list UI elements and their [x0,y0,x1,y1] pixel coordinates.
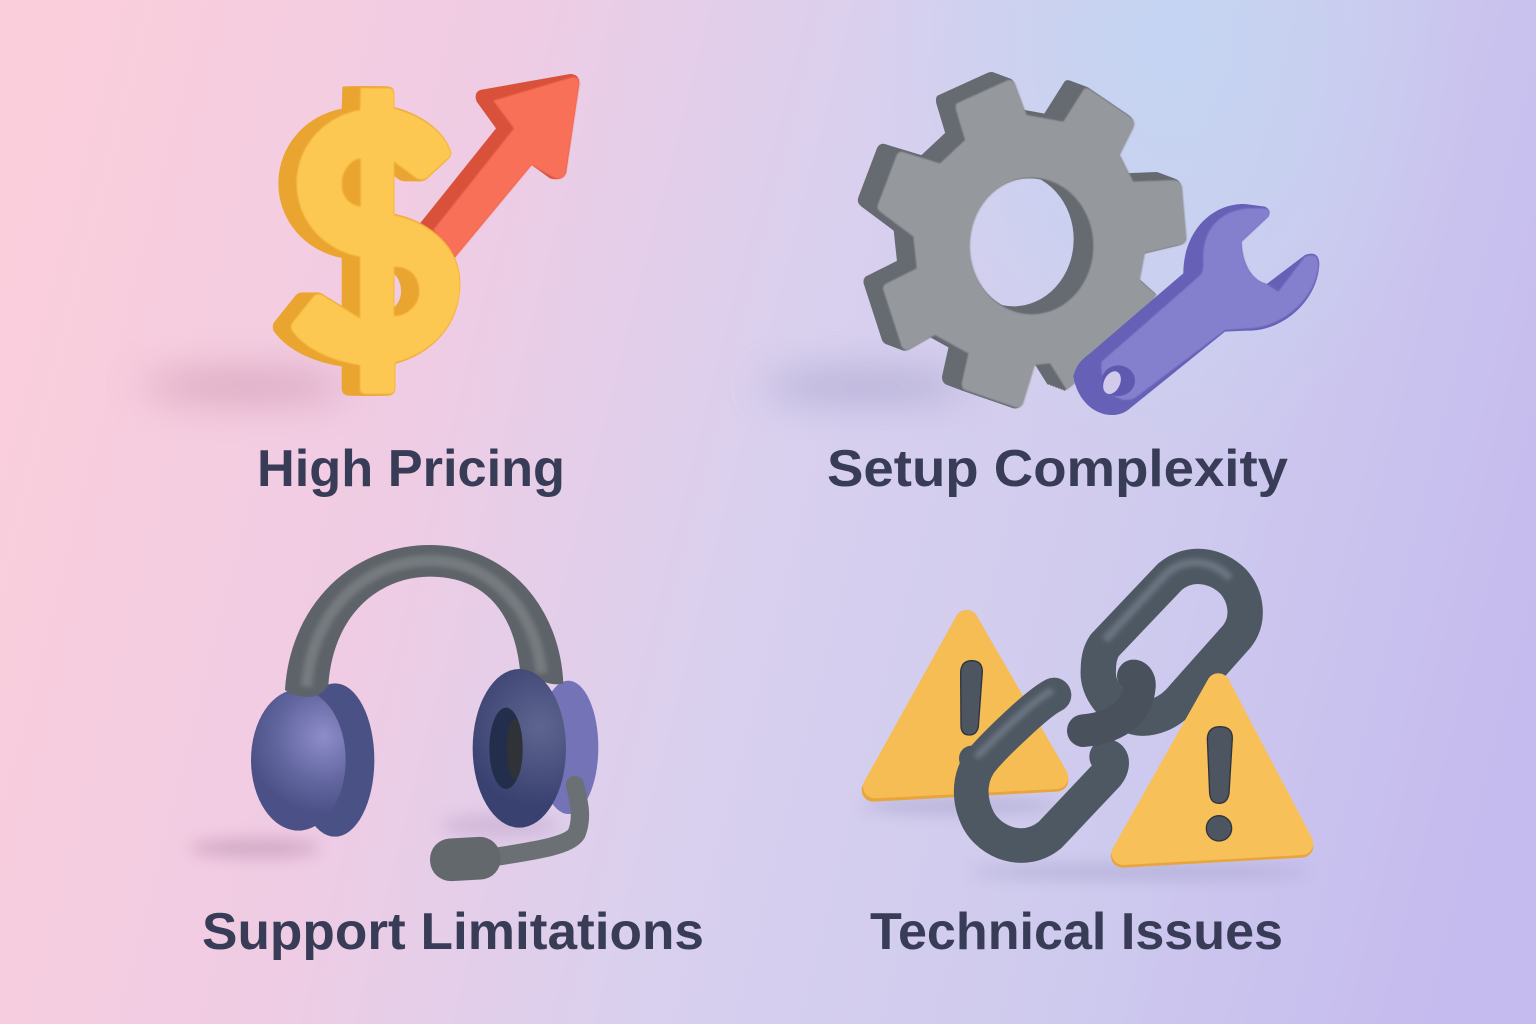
right warning triangle [1123,685,1302,856]
headband [285,545,563,697]
icon: gear [859,73,1187,408]
icon shadow: left triangle [860,800,1060,812]
gear face [877,80,1187,408]
left exclamation bar [961,661,982,735]
left ear cup back [296,683,374,837]
dollar depth [274,88,459,394]
panel: technical issues [860,563,1310,961]
left exclamation dot [959,746,984,771]
heading: high pricing: High Pricing [257,440,565,498]
icon: technical group [873,563,1302,856]
gear depth [859,73,1184,407]
left ear cup front [251,689,346,831]
icon: rising arrow [420,74,579,257]
right exclamation bar [1207,727,1232,803]
right ear cup opening [489,708,523,789]
icon shadow: dollar [140,373,350,399]
left warning triangle [873,622,1057,790]
icon shadow: chain and right triangle [970,865,1310,879]
right exclamation dot [1206,816,1232,841]
microphone capsule [429,836,502,882]
panel: setup complexity [760,73,1319,498]
right ear cup front [473,669,566,828]
heading: support limitations: Support Limitations [202,903,704,961]
right ear cup inner [507,719,523,779]
heading: technical issues: Technical Issues [870,903,1283,961]
wrench hole [1100,368,1124,397]
wrench depth [1073,204,1319,415]
microphone boom [497,785,580,857]
panel: support limitations [190,545,704,961]
wrench face [1101,208,1318,400]
icon: dollar sign [274,88,460,394]
icon shadow: gear [760,374,970,398]
heading: setup complexity: Setup Complexity [827,440,1288,498]
icon shadow: headset [190,838,320,858]
icon: headset [251,545,598,882]
icon: wrench [1073,204,1319,415]
panel: high pricing [140,74,579,498]
right ear cup back [538,681,598,814]
icon shadow: microphone [440,814,560,838]
wrench hole wall [1102,365,1135,396]
chain upper link [1098,563,1245,718]
dollar face [291,88,460,394]
chain small link [1083,676,1139,731]
chain lower link [971,692,1112,846]
